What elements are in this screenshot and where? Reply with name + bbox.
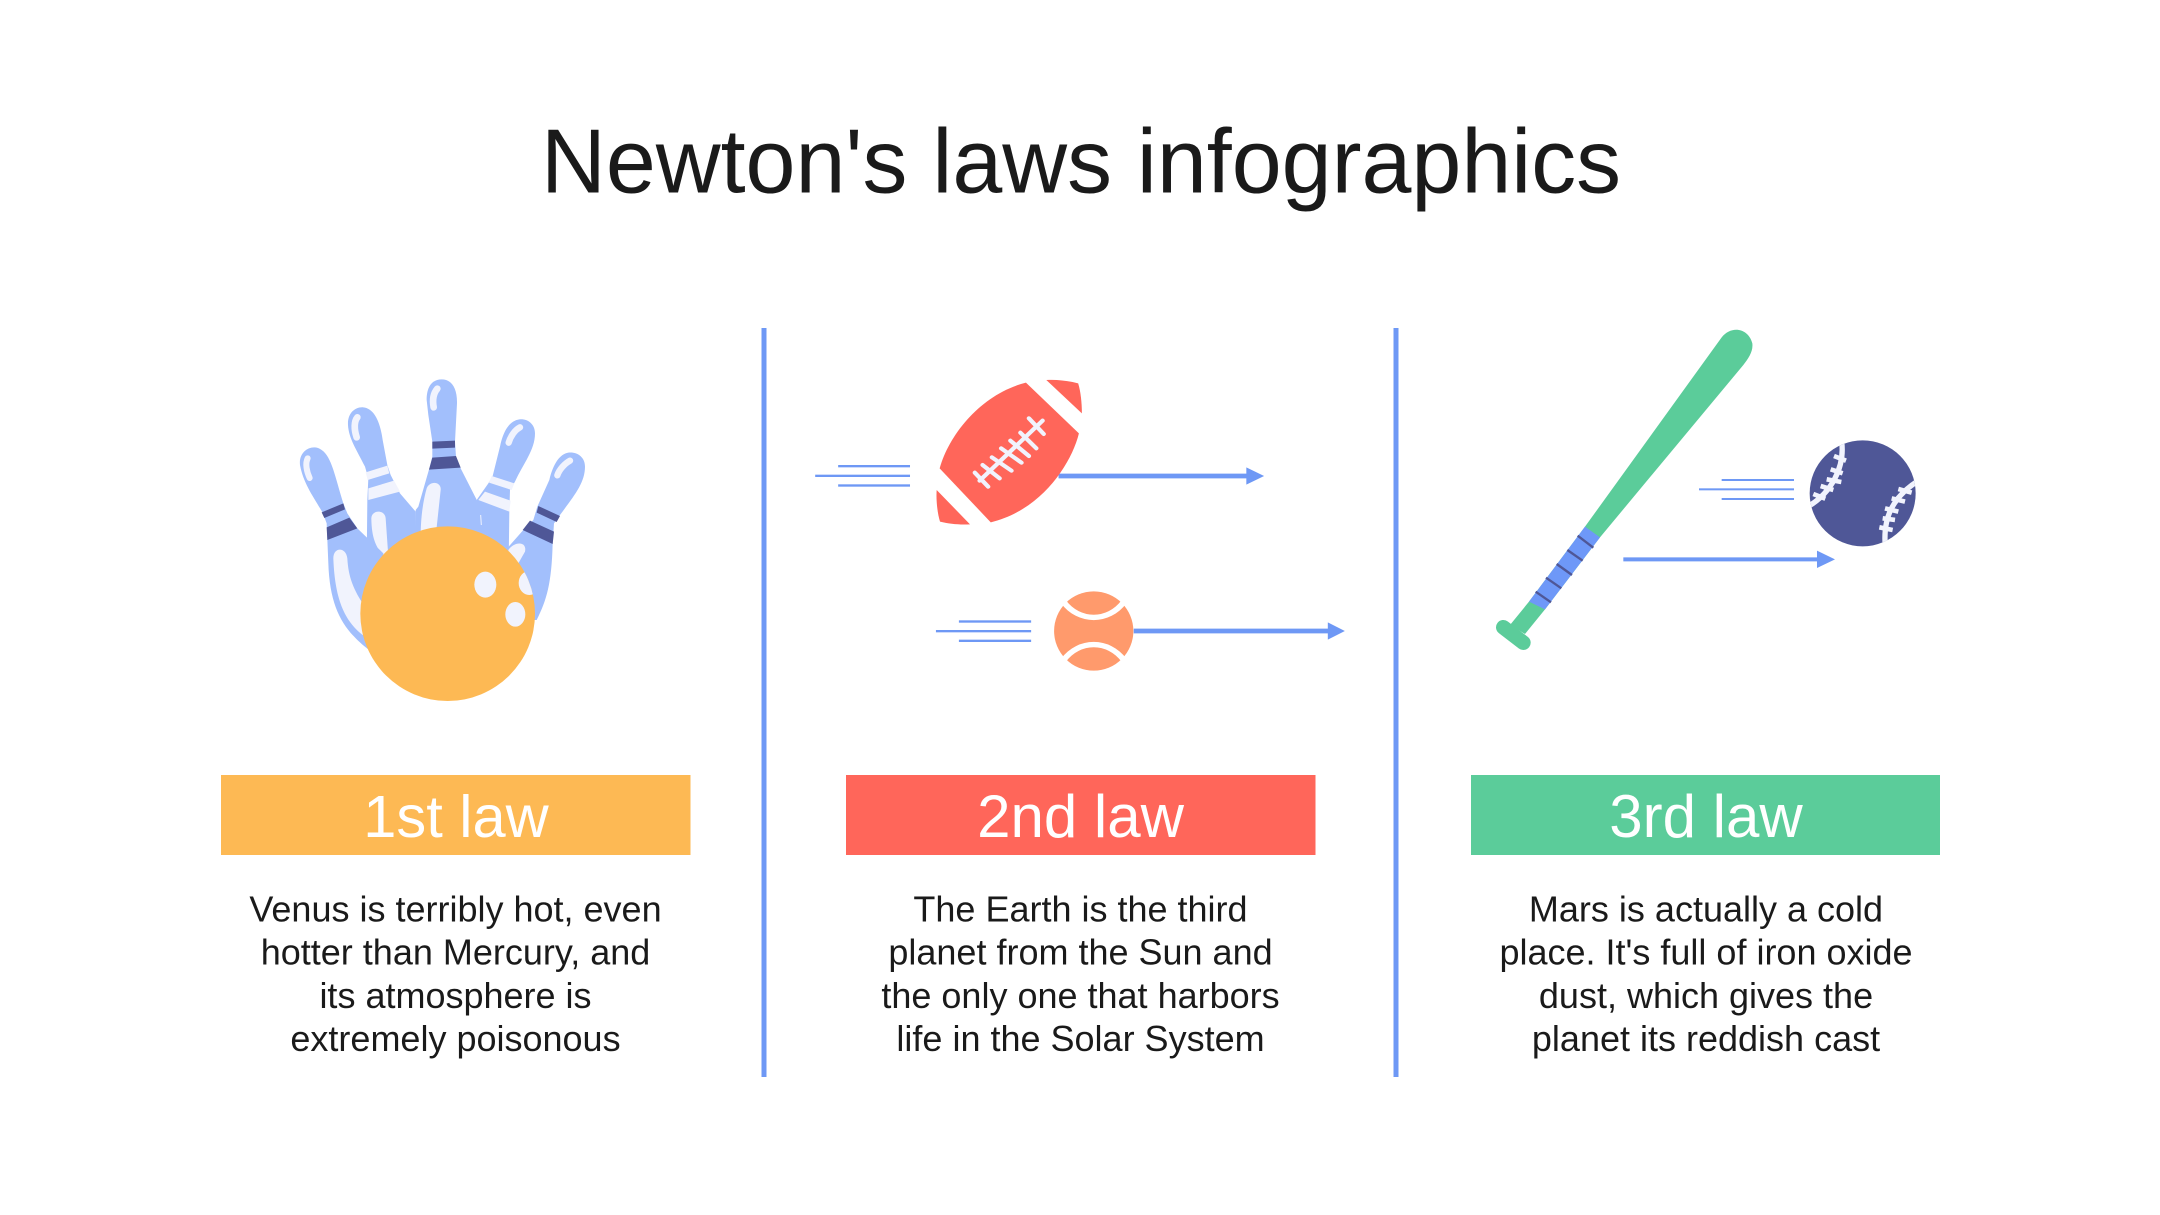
text block: 1st law description: hotter than Mercury, and bbox=[261, 932, 650, 973]
banner: 1st law bbox=[221, 775, 690, 855]
banner: 2nd law bbox=[846, 775, 1316, 855]
arrow bbox=[1623, 551, 1835, 568]
text block: 3rd law description: dust, which gives the bbox=[1539, 975, 1873, 1016]
football bbox=[936, 380, 1082, 525]
text block: 3rd law description: Mars is actually a cold bbox=[1529, 888, 1883, 930]
banner: 3rd law bbox=[1471, 775, 1940, 855]
text block: 1st law description: its atmosphere is bbox=[319, 975, 592, 1016]
text block: 1st law description bbox=[249, 888, 662, 1059]
text block: 3rd law description bbox=[1499, 888, 1913, 1059]
panel: 3rd law bbox=[1471, 775, 1940, 1059]
text block: 2nd law description: The Earth is the third bbox=[913, 888, 1248, 930]
banner: 2nd law: 2nd law bbox=[977, 783, 1185, 850]
divider left bbox=[762, 328, 766, 1077]
bowling pin far left bbox=[300, 447, 383, 653]
text block: 3rd law description: place. It's full of iron oxide bbox=[1499, 932, 1913, 973]
arrow bbox=[1059, 467, 1264, 485]
speed lines bbox=[815, 465, 910, 487]
icon: baseball bat and ball bbox=[1503, 330, 1918, 643]
bowling pin center bbox=[415, 379, 483, 563]
speed lines bbox=[936, 620, 1031, 642]
panel: 1st law bbox=[221, 775, 690, 1059]
baseball bat bbox=[1503, 330, 1752, 643]
banner: 3rd law: 3rd law bbox=[1609, 783, 1803, 850]
bowling ball bbox=[360, 526, 540, 701]
tennis ball bbox=[1054, 591, 1133, 671]
text block: 1st law description: Venus is terribly hot, even bbox=[249, 888, 662, 930]
icon: tennis ball with motion bbox=[936, 591, 1345, 671]
bowling pin second left bbox=[348, 407, 417, 563]
divider right bbox=[1394, 328, 1398, 1077]
text block: 1st law description: extremely poisonous bbox=[290, 1018, 621, 1059]
title: Newton's laws infographics bbox=[541, 112, 1621, 212]
baseball bbox=[1807, 440, 1918, 547]
icon: bowling pins and ball bbox=[300, 379, 585, 701]
text block: 2nd law description bbox=[881, 888, 1280, 1059]
text block: 3rd law description: planet its reddish cast bbox=[1532, 1018, 1880, 1059]
speed lines bbox=[1699, 479, 1794, 500]
text block: 2nd law description: the only one that harbors bbox=[881, 975, 1280, 1016]
panel: 2nd law bbox=[846, 775, 1316, 1059]
icon: american football with motion bbox=[815, 380, 1264, 525]
text block: 2nd law description: life in the Solar System bbox=[896, 1018, 1265, 1059]
arrow bbox=[1134, 622, 1345, 640]
banner: 1st law: 1st law bbox=[363, 783, 550, 850]
text block: 2nd law description: planet from the Sun and bbox=[888, 932, 1273, 973]
bowling pin second right bbox=[477, 419, 535, 563]
bowling pin far right bbox=[503, 453, 585, 620]
